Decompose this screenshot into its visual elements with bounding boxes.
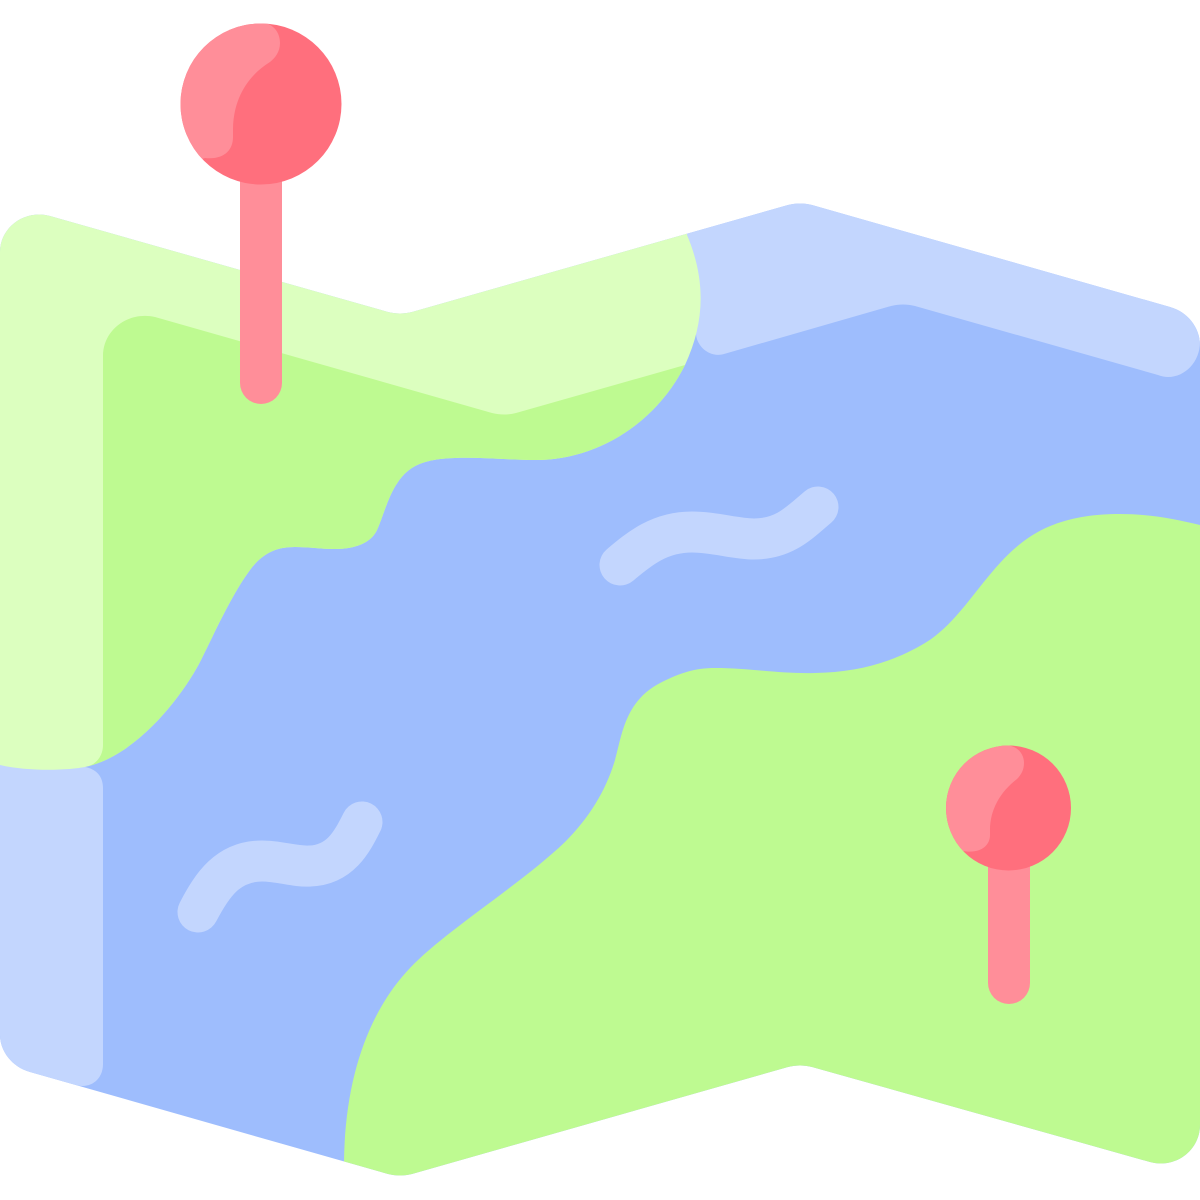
- upper left darker green land: [85, 316, 685, 767]
- large pin head: [180, 24, 342, 184]
- small pin head: [946, 746, 1071, 870]
- lower right green land: [344, 514, 1200, 1200]
- upper left light green land: [0, 190, 701, 770]
- large pin: [170, 10, 342, 404]
- top light blue band: [687, 204, 1200, 377]
- river wave upper: [620, 507, 818, 565]
- large pin stem: [240, 150, 282, 404]
- bottom left light blue panel: [0, 765, 103, 1086]
- small pin: [938, 735, 1071, 1004]
- small pin highlight: [946, 746, 1024, 852]
- river wave lower: [198, 822, 362, 912]
- small pin stem: [988, 840, 1030, 1004]
- large pin highlight: [180, 24, 280, 159]
